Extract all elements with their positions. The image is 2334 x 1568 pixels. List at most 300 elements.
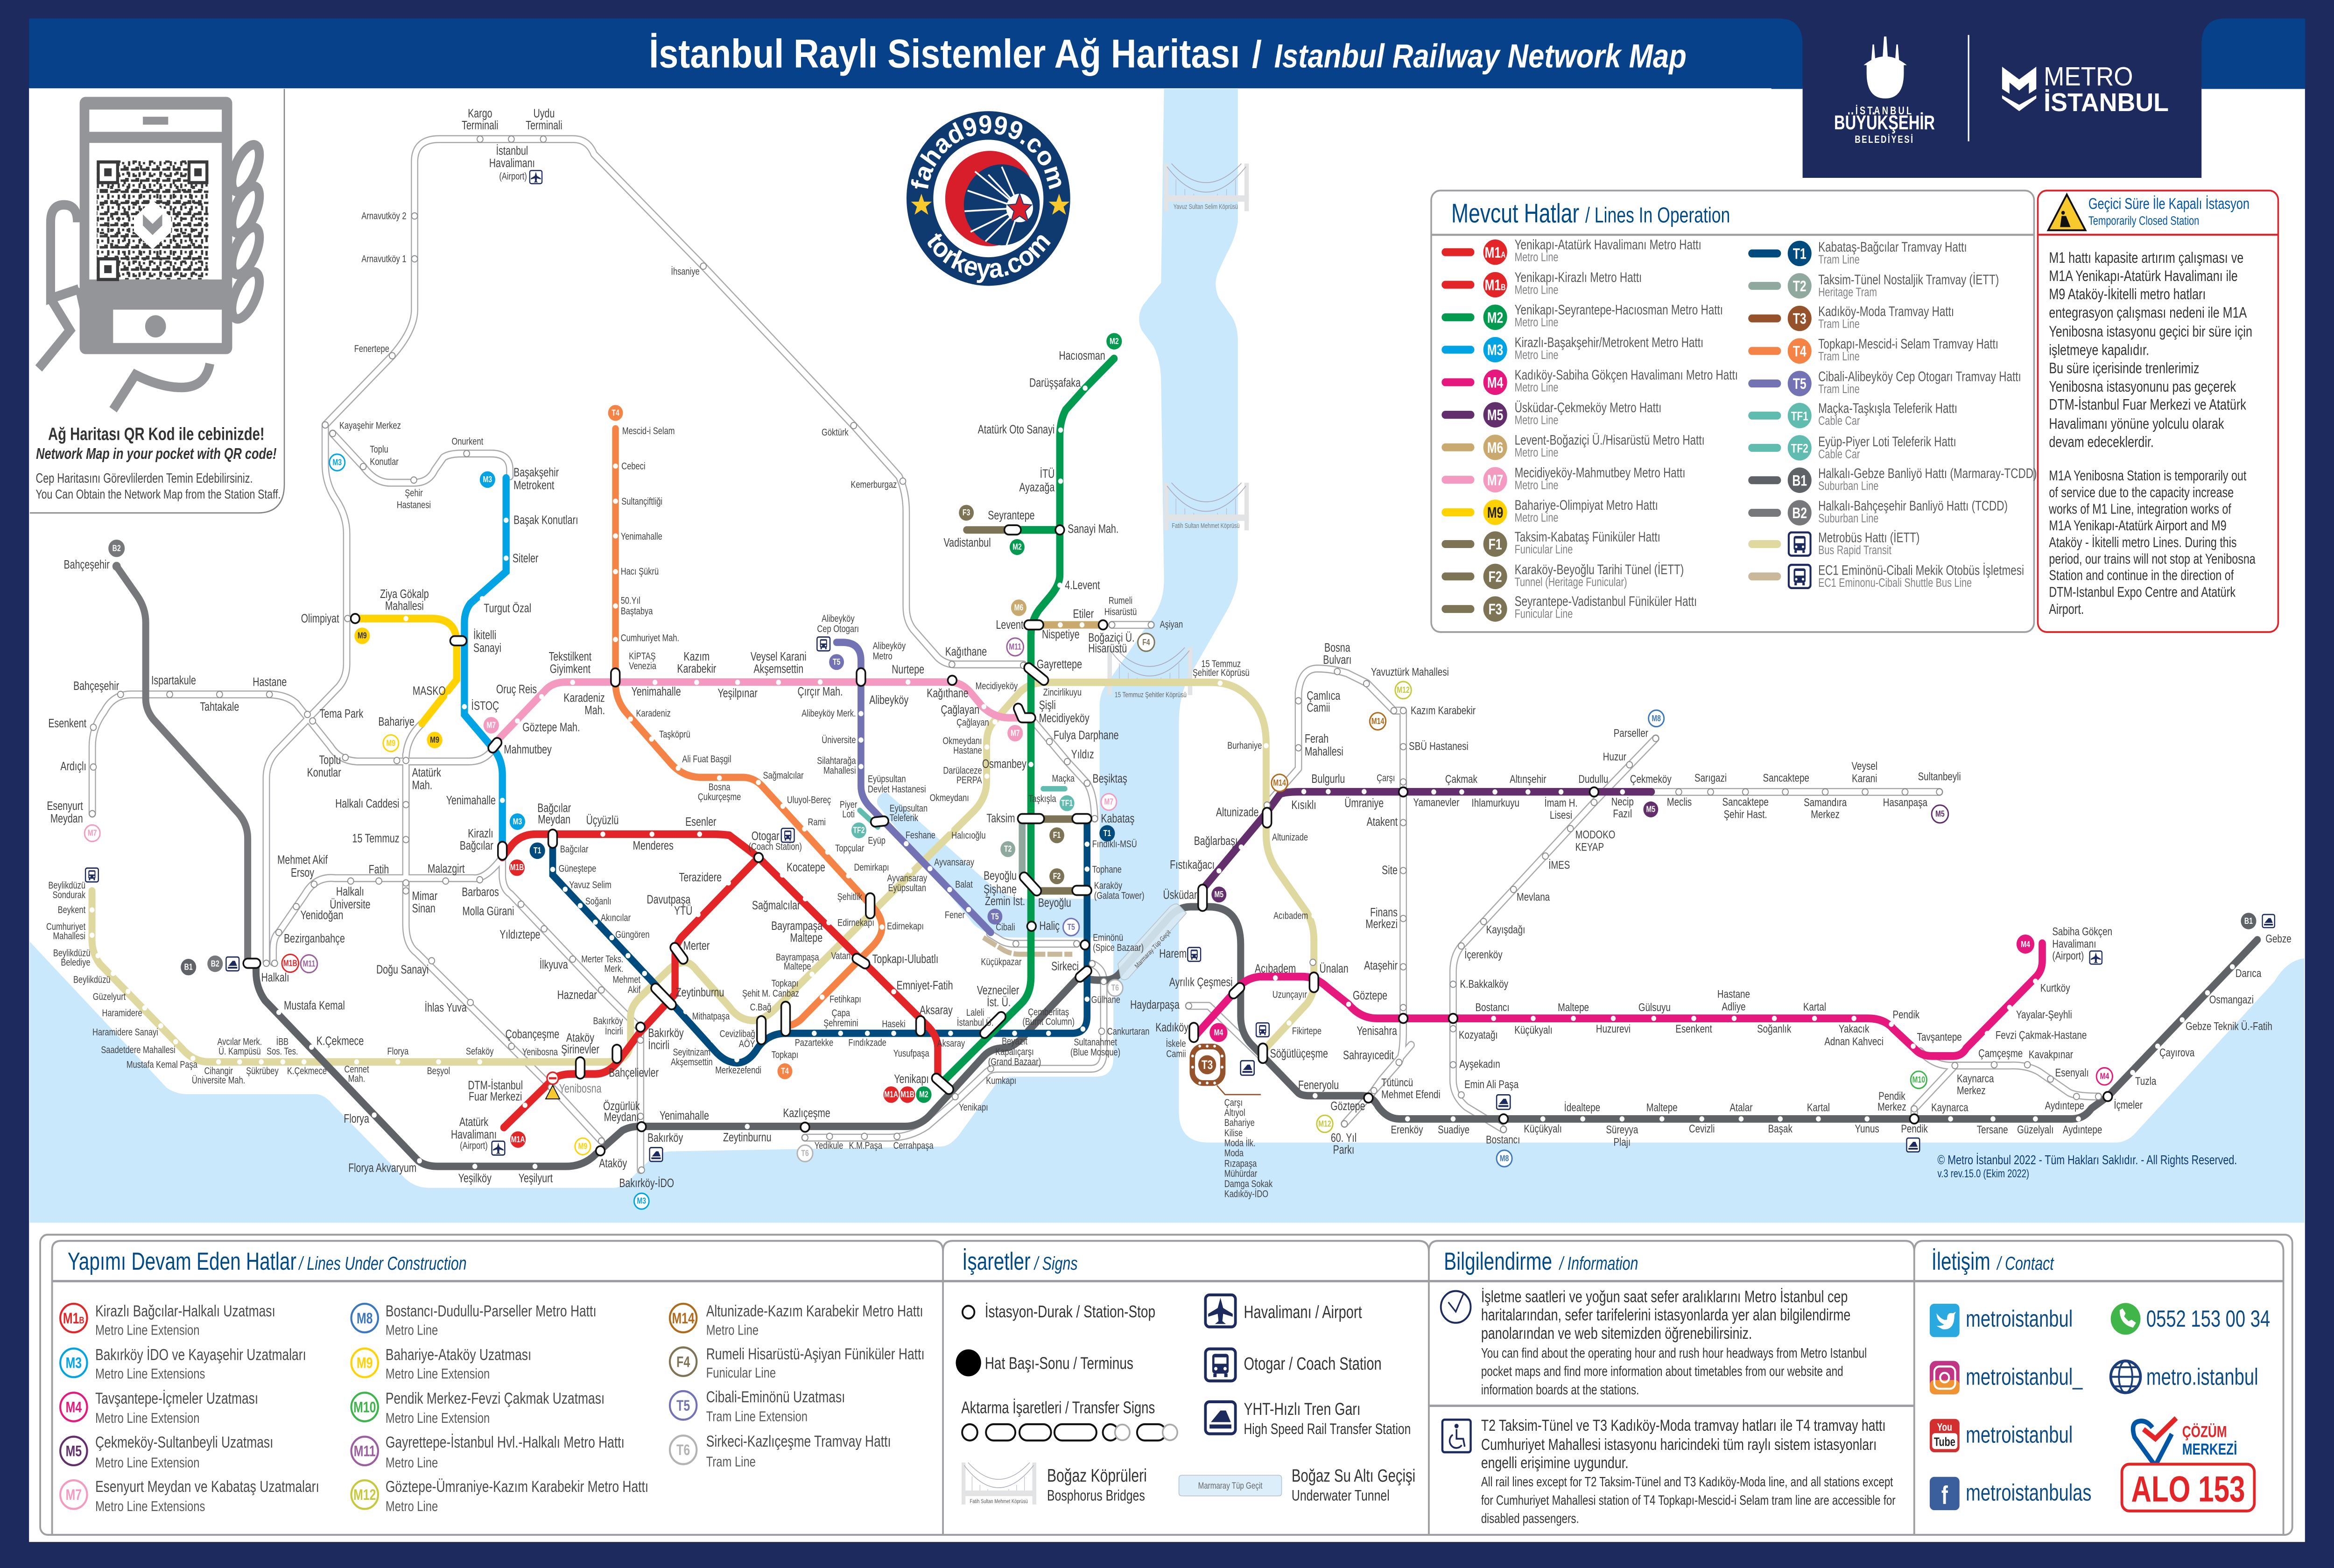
station labels: north and Europe west: Mah.	[412, 778, 432, 792]
station labels: north and Europe west: Terminali	[462, 119, 499, 132]
legend names: Seyrantepe-Vadistanbul Füniküler Hattı	[1515, 593, 1697, 609]
station labels: north and Europe west: Mah.	[584, 703, 605, 717]
station labels: north and Europe west	[46, 106, 897, 1189]
station labels: central Europe: Beşiktaş	[1093, 772, 1127, 785]
station labels: north and Europe west: Giyimkent	[550, 662, 591, 675]
station labels: Bosphorus Asian shore: Kadıköy-İDO	[1224, 1188, 1268, 1200]
station labels: Bosphorus Asian shore: Çamlıca	[1307, 689, 1341, 702]
station labels: north and Europe west: Bosna	[709, 782, 731, 793]
station labels: central Europe: Aksaray	[920, 1003, 953, 1017]
station labels: central Europe: Kağıthane	[927, 686, 969, 700]
station labels: north and Europe west: Haramidere Sanayi	[92, 1027, 158, 1038]
station labels: Bosphorus Asian shore: Bahariye	[1224, 1118, 1255, 1129]
icon: IBB emblem	[1863, 36, 1907, 98]
station labels: north and Europe west: Yenidoğan	[300, 908, 343, 922]
station labels: Anatolian side: Kurtköy	[2040, 981, 2070, 994]
station labels: north and Europe west: Başakşehir	[513, 465, 559, 479]
station and terminus signs	[956, 1302, 1155, 1376]
station labels: north and Europe west: Üçyüzlü	[586, 813, 619, 827]
station labels: central Europe: Sirkeci	[1051, 959, 1079, 973]
station labels: central Europe: Haliç	[1039, 919, 1060, 933]
station labels: north and Europe west: Sultançiftliği	[621, 496, 662, 507]
panel: information	[1429, 1241, 1914, 1534]
station labels: Anatolian side: Kaynarca	[1931, 1101, 1968, 1114]
station labels: Anatolian side: Yakacık	[1839, 1022, 1869, 1035]
youtube: You	[1937, 1421, 1952, 1434]
line badges filled: M6	[1014, 603, 1023, 612]
construction names: Metro Line Extension	[95, 1322, 199, 1338]
heading	[68, 1247, 467, 1275]
station labels: north and Europe west: Doğu Sanayi	[376, 963, 429, 976]
icon: underwater tunnel	[1179, 1466, 1415, 1505]
line badges filled: M1A	[884, 1090, 898, 1099]
station labels: central Europe: Kumkapı	[986, 1076, 1016, 1086]
station labels: Bosphorus Asian shore: Kadıköy	[1155, 1020, 1189, 1034]
station labels: Bosphorus Asian shore: Uzunçayır	[1272, 990, 1307, 1000]
legend names: Tram Line	[1818, 350, 1860, 363]
heading: / Signs	[1033, 1253, 1078, 1274]
station labels: north and Europe west: Hacı Şükrü	[621, 566, 659, 577]
line: Metrobus	[92, 682, 1314, 1062]
station labels: Anatolian side: Karani	[1852, 772, 1877, 785]
station labels: Anatolian side: İmam H.	[1545, 796, 1578, 809]
station labels: central Europe: Şehit M. Canbaz	[742, 988, 799, 999]
legend names: Suburban Line	[1818, 512, 1878, 525]
line badges filled: M7	[486, 721, 496, 730]
construction badges: M8	[357, 1310, 373, 1327]
panel: temporarily closed station: Bu süre içerisinde trenlerimiz	[2049, 360, 2199, 377]
line badges filled: M2	[919, 1090, 928, 1099]
station labels: north and Europe west: Beylikdüzü	[73, 975, 111, 985]
station labels: central Europe: Edirnekapı	[837, 917, 874, 928]
station labels: Anatolian side: Meclis	[1667, 795, 1692, 809]
panel: information: panolarından ve web sitemizden öğrenebilirsiniz.	[1481, 1324, 1752, 1343]
line badges outlined: M14	[1371, 717, 1385, 726]
station labels: central Europe: Zemin İst.	[985, 894, 1025, 908]
station labels: central Europe: İstanbul Ü.	[957, 1018, 994, 1028]
station labels: Anatolian side: Huzurevi	[1596, 1022, 1631, 1035]
station labels: north and Europe west: Şehir	[405, 488, 423, 499]
station labels: Anatolian side: Kazım Karabekir	[1411, 703, 1476, 717]
station labels: central Europe: Çağlayan	[941, 703, 979, 717]
legend badges: T2	[1793, 278, 1807, 295]
copyright	[1938, 1152, 2237, 1180]
station labels: north and Europe west: Çobançeşme	[506, 1027, 559, 1041]
line: M1	[502, 834, 938, 1127]
panel: temporarily closed station: Airport.	[2049, 601, 2084, 617]
line badges filled: B2	[112, 544, 121, 553]
line badges outlined: M1B	[283, 959, 297, 968]
panel: information: information boards at the stations.	[1481, 1382, 1639, 1398]
line badges outlined: F4	[1142, 638, 1150, 647]
construction badges: M3	[66, 1355, 82, 1372]
cozum merkezi logo: MERKEZİ	[2182, 1441, 2237, 1458]
station labels: Bosphorus Asian shore: Merkezi	[1365, 917, 1398, 931]
station labels: central Europe: C.Bağ	[750, 1002, 771, 1013]
line badges outlined: M11	[1009, 642, 1021, 652]
facebook	[1930, 1477, 2092, 1510]
station labels: north and Europe west: Beylikdüzü	[53, 948, 91, 959]
station labels: north and Europe west: Yeşilköy	[458, 1171, 492, 1185]
line: T1	[553, 819, 1087, 1063]
line badges filled: M2	[1012, 542, 1022, 552]
line badges filled: M7	[1011, 729, 1020, 738]
legend badges: M6	[1487, 440, 1503, 457]
legend badges: M1A	[1485, 245, 1506, 261]
station labels: Bosphorus Asian shore: Harem	[1159, 947, 1187, 960]
legend badges: F2	[1489, 569, 1502, 585]
gray station circles	[92, 139, 2098, 1170]
station labels: north and Europe west: İSTOÇ	[471, 699, 499, 712]
legend names	[1515, 237, 2037, 620]
station labels: north and Europe west: Onurkent	[451, 436, 484, 447]
station labels: north and Europe west: Florya	[344, 1112, 369, 1125]
legend names: Taksim-Tünel Nostaljik Tramvay (İETT)	[1818, 272, 1999, 288]
legend names: Taksim-Kabataş Füniküler Hattı	[1515, 529, 1660, 545]
station labels: Anatolian side: Kartal	[1803, 1000, 1826, 1013]
station labels: north and Europe west: Tahtakale	[200, 700, 239, 713]
heading	[962, 1247, 1078, 1275]
legend badges: T1	[1793, 246, 1807, 262]
station labels: north and Europe west: Merter	[683, 939, 710, 952]
station labels: central Europe: Demirkapı	[854, 862, 889, 873]
legend badges: T5	[1793, 376, 1807, 393]
station labels: Bosphorus Asian shore: 60. Yıl	[1331, 1131, 1357, 1145]
station labels: north and Europe west: Halkalı	[336, 885, 364, 898]
station labels: Bosphorus Asian shore: Çarşı	[1377, 773, 1395, 784]
legend names: Funicular Line	[1515, 542, 1573, 556]
copyright: v.3 rev.15.0 (Ekim 2022)	[1938, 1168, 2029, 1180]
line badges outlined: M14	[1273, 778, 1287, 788]
station labels: central Europe: Tophane	[1092, 864, 1122, 875]
icon: T3 Kadıköy-Moda ring	[1192, 1046, 1261, 1095]
station labels: north and Europe west: Güneştepe	[559, 864, 596, 874]
station labels: central Europe: Boğaziçi Ü.	[1088, 631, 1134, 644]
station labels: Anatolian side: Necip	[1611, 795, 1634, 808]
line badges outlined: M5	[1935, 809, 1945, 819]
instagram: metroistanbul_	[1966, 1364, 2083, 1390]
construction badges: T6	[676, 1442, 690, 1459]
station labels: central Europe: Okmeydanı	[930, 793, 969, 804]
station labels: Bosphorus Asian shore: Burhaniye	[1227, 740, 1262, 752]
line: T2 heritage tram	[1021, 819, 1023, 877]
bottom panels frame	[40, 1235, 2292, 1535]
station labels: Anatolian side: Tütüncü	[1381, 1076, 1413, 1089]
station labels: north and Europe west: Yenimahalle	[632, 684, 681, 698]
panel: temporarily closed station: DTM-İstanbul Fuar Merkezi ve Atatürk	[2049, 396, 2246, 414]
station labels: north and Europe west: Cumhuriyet	[46, 921, 86, 933]
station labels: central Europe: Laleli	[966, 1007, 984, 1019]
station labels: north and Europe west: Göztepe Mah.	[522, 720, 580, 734]
station labels: central Europe: Alibeyköy	[822, 613, 855, 625]
line badges filled: M9	[430, 735, 439, 745]
line badges filled: M3	[513, 817, 522, 826]
station labels: central Europe: Bayrampaşa	[771, 919, 823, 932]
legend badges: M2	[1487, 309, 1503, 326]
construction badges: M4	[66, 1399, 82, 1416]
heading: Yapımı Devam Eden Hatlar	[68, 1247, 296, 1275]
legend badges: M1B	[1485, 277, 1506, 294]
legend names: Cable Car	[1818, 447, 1860, 461]
icon: bosphorus bridges: Fatih Sultan Mehmet Köprüsü	[970, 1498, 1028, 1505]
station labels: Anatolian side: Esenkent	[1675, 1022, 1712, 1035]
station labels: north and Europe west: Bezirganbahçe	[284, 931, 345, 945]
station labels: north and Europe west: Florya	[387, 1046, 409, 1057]
line badges filled: TF2	[853, 826, 865, 835]
station labels: north and Europe west: Cevizlibağ	[720, 1028, 755, 1040]
station labels: Anatolian side: SBÜ Hastanesi	[1409, 739, 1469, 752]
station labels: north and Europe west: Siteler	[513, 551, 539, 565]
station labels: Bosphorus Asian shore: Fıstıkağacı	[1170, 858, 1215, 871]
station labels: north and Europe west: Akşemsettin	[671, 1057, 713, 1068]
station labels: central Europe: Kapalıçarşı	[995, 1047, 1034, 1057]
station labels: Anatolian side: Kartal	[1807, 1101, 1830, 1114]
station labels: central Europe: Beyazıt	[1002, 1036, 1028, 1047]
station labels: Bosphorus Asian shore: Altıyol	[1224, 1108, 1245, 1118]
youtube	[1930, 1419, 2073, 1452]
line badges outlined: M11	[303, 959, 315, 969]
station labels: north and Europe west: Yenimahalle	[621, 531, 662, 542]
station labels: north and Europe west: Tekstilkent	[549, 650, 592, 663]
station labels: north and Europe west: Şükrübey	[246, 1066, 279, 1077]
station labels: north and Europe west: Bakırköy	[593, 1016, 623, 1027]
station and terminus signs: Hat Başı-Sonu / Terminus	[985, 1354, 1133, 1372]
terminus stubs	[115, 565, 118, 568]
station labels: north and Europe west: Yavuz Selim	[569, 879, 612, 891]
line badges outlined: M12	[1397, 686, 1410, 695]
station labels: central Europe: Alibeyköy	[873, 641, 906, 652]
logos block: METRO	[2044, 62, 2133, 91]
station labels: north and Europe west: Saadetdere Mahallesi	[101, 1045, 176, 1056]
station labels: central Europe: Rami	[808, 817, 826, 828]
line badges filled: M5	[1646, 805, 1655, 814]
construction names: Sirkeci-Kazlıçeşme Tramvay Hattı	[706, 1433, 891, 1450]
station labels: Anatolian side: Sultanbeyli	[1918, 770, 1961, 783]
icon: fahad9999 torkeya round logo: fahad9999.com	[906, 110, 1071, 192]
line badges outlined: T6	[801, 1149, 809, 1158]
station labels: north and Europe west: Cumhuriyet Mah.	[621, 633, 679, 644]
station labels: Anatolian side: Sarıgazi	[1694, 771, 1727, 784]
station labels: Anatolian side: Gebze	[2265, 932, 2292, 945]
panel: QR code	[30, 89, 284, 513]
legend names: Metro Line	[1515, 348, 1558, 361]
construction names: Metro Line Extensions	[95, 1498, 205, 1514]
station labels: north and Europe west: Yıldıztepe	[499, 928, 540, 941]
station labels: Anatolian side: Soğanlık	[1757, 1022, 1791, 1035]
station labels: Anatolian side: Atalar	[1729, 1101, 1752, 1114]
construction names: Pendik Merkez-Fevzi Çakmak Uzatması	[386, 1390, 605, 1407]
construction names: Metro Line Extensions	[95, 1365, 205, 1382]
station labels: Anatolian side: Fazıl	[1613, 807, 1632, 820]
station labels: north and Europe west: Cihangir	[204, 1066, 233, 1077]
icon: bosphorus bridges: Boğaz Köprüleri	[1047, 1465, 1147, 1486]
station labels: central Europe: Teleferik	[890, 813, 918, 824]
station labels: Anatolian side: Küçükyalı	[1514, 1023, 1553, 1036]
station labels: central Europe: Eyüp	[868, 835, 886, 846]
station labels: north and Europe west: Terazidere	[679, 870, 722, 884]
station labels: central Europe: Eyüpsultan	[890, 803, 928, 814]
copyright: © Metro İstanbul 2022 - Tüm Hakları Saklıdır. - All Rights Reserved.	[1938, 1152, 2237, 1167]
icon: clock	[1441, 1291, 1471, 1323]
station labels: north and Europe west: Sos. Tes.	[267, 1046, 298, 1057]
station labels: central Europe: Nispetiye	[1042, 627, 1080, 641]
legend badges: M4	[1487, 374, 1503, 391]
station labels: north and Europe west: Bağcılar	[560, 844, 589, 855]
station labels: Anatolian side: Küçükyalı	[1524, 1122, 1562, 1135]
construction names: Bahariye-Ataköy Uzatması	[386, 1346, 531, 1364]
station labels: Bosphorus Asian shore: Site	[1382, 863, 1398, 877]
construction names: Metro Line Extension	[95, 1454, 199, 1470]
station labels: central Europe: Çırçır Mah.	[798, 684, 843, 698]
station labels: north and Europe west: Toplu	[319, 753, 341, 766]
station labels: central Europe: Hastane	[953, 745, 982, 756]
construction names: Metro Line Extension	[386, 1410, 490, 1426]
station labels: Bosphorus Asian shore: Finans	[1370, 905, 1398, 919]
station labels: north and Europe west: Merkezefendi	[715, 1065, 761, 1076]
station labels: north and Europe west: Bahçeşehir	[64, 557, 110, 571]
panel: temporarily closed station: M1A Yenikapı-Atatürk Havalimanı ile	[2049, 268, 2238, 285]
icon: fahad9999 torkeya round logo	[906, 110, 1071, 286]
station labels: central Europe: Topkapı	[772, 1049, 798, 1061]
station labels: north and Europe west: Zeytinburnu	[723, 1130, 772, 1144]
legend names: Halkalı-Gebze Banliyö Hattı (Marmaray-TCDD)	[1818, 465, 2037, 481]
station labels: central Europe: Atatürk Oto Sanayi	[978, 422, 1055, 436]
facebook: f	[1941, 1481, 1948, 1510]
station labels: north and Europe west: Fenertepe	[354, 344, 389, 354]
line: M2 Seyrantepe branch	[1017, 529, 1060, 531]
station labels: Bosphorus Asian shore: Damga Sokak	[1224, 1179, 1273, 1190]
construction names: Tram Line Extension	[706, 1408, 808, 1424]
construction names: Metro Line Extension	[95, 1410, 199, 1426]
icon: warning triangle	[2048, 195, 2085, 230]
legend names: Bus Rapid Transit	[1818, 543, 1891, 557]
station labels: Anatolian side: Adliye	[1722, 1000, 1746, 1013]
station labels: central Europe: Topçular	[835, 843, 865, 854]
QR code	[97, 161, 208, 280]
station labels: north and Europe west: YTÜ	[674, 904, 692, 917]
station labels: north and Europe west: Ü. Kampüsü	[218, 1046, 261, 1057]
station labels: north and Europe west: Yeşilyurt	[519, 1171, 553, 1185]
transfer signs: Aktarma İşaretleri / Transfer Signs	[961, 1398, 1155, 1417]
station labels: central Europe: İTÜ	[1040, 467, 1055, 480]
station labels: central Europe: Maltepe	[784, 961, 811, 972]
station labels: north and Europe west: Cennet	[344, 1064, 369, 1075]
station labels: Bosphorus Asian shore: Haydarpaşa	[1130, 998, 1180, 1012]
twitter	[1930, 1304, 2073, 1337]
station labels: central Europe: Yenikapı	[959, 1102, 988, 1113]
station labels: central Europe: (Coach Station)	[748, 842, 802, 852]
station labels: Bosphorus Asian shore: Camii	[1307, 701, 1330, 714]
construction names: Metro Line	[706, 1322, 759, 1338]
legend names: Kadıköy-Moda Tramvay Hattı	[1818, 303, 1954, 319]
station labels: north and Europe west: Yenimahalle	[660, 1109, 709, 1122]
legend names: Cibali-Alibeyköy Cep Otogarı Tramvay Hattı	[1818, 369, 2021, 384]
station labels: north and Europe west: Mescid-i Selam	[622, 426, 675, 437]
heading	[1444, 1247, 1638, 1275]
station labels: north and Europe west: MASKO	[413, 684, 446, 697]
station labels: Anatolian side: Sancaktepe	[1722, 795, 1769, 809]
station labels: central Europe: Devlet Hastanesi	[868, 784, 926, 795]
station labels: Anatolian side: Tuzla	[2135, 1075, 2157, 1088]
station labels: Anatolian side: Çamçeşme	[1978, 1047, 2023, 1060]
cozum merkezi logo: ÇÖZÜM	[2182, 1424, 2227, 1441]
line: T4	[616, 429, 882, 1026]
station labels: central Europe: Rumeli	[1109, 596, 1132, 606]
station labels: north and Europe west: Zeytinburnu	[676, 985, 724, 999]
heading: İletişim	[1932, 1247, 1990, 1275]
station labels: north and Europe west: Mehmet	[612, 975, 641, 985]
panel: temporarily closed station	[2038, 190, 2278, 632]
station labels: north and Europe west: Terminali	[526, 119, 562, 132]
heading	[1451, 198, 1730, 228]
station labels: central Europe: Darüşşafaka	[1029, 376, 1081, 389]
line badges filled: T4	[612, 408, 620, 418]
station labels: Anatolian side: Adnan Kahveci	[1824, 1034, 1884, 1048]
icon: fahad9999 torkeya round logo: torkeya.com	[921, 225, 1056, 284]
station labels: north and Europe west: Oruç Reis	[496, 682, 537, 696]
station labels: Anatolian side: Tavşantepe	[1917, 1030, 1962, 1043]
station labels: Anatolian side: İMES	[1548, 858, 1570, 871]
station labels: north and Europe west: Tema Park	[320, 707, 364, 720]
station labels: north and Europe west: Taşköprü	[659, 729, 690, 740]
station labels: central Europe: Sağmalcılar	[752, 898, 801, 912]
station labels: Bosphorus Asian shore: Bulvarı	[1323, 653, 1351, 667]
station labels: north and Europe west: Yenibosna	[559, 1082, 602, 1095]
station labels: central Europe: Piyer	[840, 800, 858, 810]
station labels: central Europe: Topkapı	[772, 978, 798, 989]
icon: Marmaray tunnel	[1118, 904, 1186, 980]
logos block: İSTANBUL	[2044, 89, 2169, 117]
station labels: Anatolian side: Çekmeköy	[1630, 773, 1672, 786]
station labels: Bosphorus Asian shore: Fikirtepe	[1292, 1026, 1322, 1037]
station labels: Anatolian side: Kozyatağı	[1459, 1028, 1498, 1041]
construction names: Metro Line	[386, 1498, 438, 1514]
station labels: north and Europe west: Sinan	[412, 901, 436, 915]
station labels: central Europe: Bayrampaşa	[776, 952, 819, 963]
station labels: Anatolian side: Güzelyalı	[2017, 1123, 2054, 1136]
station labels: north and Europe west: Ziya Gökalp	[380, 587, 429, 600]
station labels: Anatolian side: Veysel	[1852, 759, 1877, 772]
legend badges: B1	[1792, 472, 1807, 489]
station labels: Bosphorus Asian shore: Camii	[1166, 1049, 1186, 1060]
station labels: north and Europe west: (Airport)	[460, 1140, 488, 1152]
construction badges: F4	[676, 1354, 690, 1371]
line badges outlined: M3	[332, 458, 342, 467]
line: B1 Marmaray	[256, 907, 2257, 1167]
panel: temporarily closed station: işletmeye kapalıdır.	[2049, 342, 2149, 359]
station labels: Anatolian side: Parseller	[1614, 726, 1648, 739]
panel: temporarily closed station: M9 Ataköy-İkitelli metro hatları	[2049, 286, 2206, 303]
panel: QR code: Ağ Haritası QR Kod ile cebinizde!	[48, 424, 265, 444]
station labels: north and Europe west: Kargo	[468, 106, 492, 120]
station labels: north and Europe west: Mahallesi	[53, 931, 85, 942]
station labels: north and Europe west: Konutlar	[307, 766, 341, 779]
station labels: central Europe: Hacıosman	[1059, 349, 1105, 362]
bosphorus bridges: Yavuz Sultan Selim Köprüsü	[1174, 203, 1238, 211]
icons: airport, coach, high speed rail: Havalimanı / Airport	[1244, 1303, 1362, 1322]
line: M2	[945, 359, 1114, 1080]
title: Istanbul Railway Network Map	[1274, 37, 1687, 75]
station labels: north and Europe west: Hastanesi	[397, 500, 431, 511]
station labels: north and Europe west: Bağcılar	[460, 838, 493, 852]
station labels: north and Europe west: Üniversite Mah.	[192, 1075, 245, 1086]
construction badges: M11	[354, 1443, 376, 1460]
station labels: Anatolian side: Dudullu	[1578, 773, 1608, 786]
station labels: Anatolian side: Bostancı	[1486, 1133, 1520, 1146]
station labels: north and Europe west: Haramidere	[102, 1008, 142, 1019]
station labels: central Europe	[742, 349, 1183, 1152]
line: M9	[355, 619, 457, 724]
